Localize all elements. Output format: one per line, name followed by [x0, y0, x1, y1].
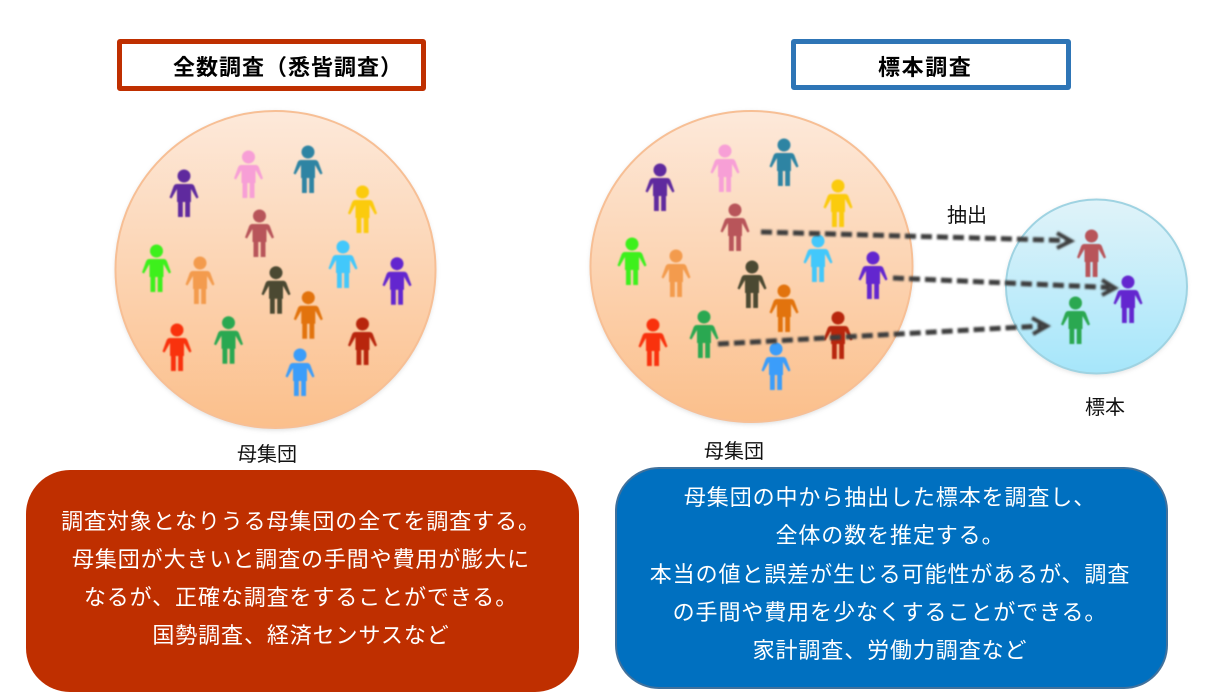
- heading: census: [117, 39, 426, 91]
- census text line 4: 国勢調査、経済センサスなど: [152, 623, 450, 648]
- panel: sample survey description: [615, 467, 1168, 689]
- arrow: middle sample extraction: [893, 278, 1115, 295]
- label: sample: 標本: [1085, 397, 1125, 419]
- label: right population: 母集団: [704, 441, 764, 463]
- people in sample: [1061, 230, 1142, 344]
- sample text line 4: の手間や費用を少なくすることができる。: [673, 600, 1107, 625]
- sample text line 5: 家計調査、労働力調査など: [753, 638, 1027, 663]
- left population circle: [116, 111, 436, 430]
- label: extraction: 抽出: [947, 205, 987, 227]
- sample text line 2: 全体の数を推定する。: [775, 523, 1004, 548]
- census text line 2: 母集団が大きいと調査の手間や費用が膨大に: [72, 547, 530, 572]
- sample text line 1: 母集団の中から抽出した標本を調査し、: [684, 485, 1096, 510]
- right population circle: [590, 111, 912, 424]
- people in right population: [618, 138, 888, 390]
- census text line 3: なるが、正確な調査をすることができる。: [84, 585, 518, 610]
- people in left population: [142, 146, 412, 396]
- label: left population: 母集団: [237, 444, 297, 466]
- sample text line 3: 本当の値と誤差が生じる可能性があるが、調査: [650, 562, 1130, 587]
- panel: census description: [26, 470, 579, 692]
- census text line 1: 調査対象となりうる母集団の全てを調査する。: [61, 509, 541, 534]
- heading: sample survey: [791, 39, 1071, 90]
- arrow: top sample extraction: [761, 232, 1071, 248]
- sample circle: [1006, 200, 1187, 376]
- heading: sample survey: 標本調査: [878, 55, 972, 80]
- heading: census: 全数調査（悉皆調査）: [173, 55, 403, 80]
- arrow: bottom sample extraction: [718, 318, 1047, 344]
